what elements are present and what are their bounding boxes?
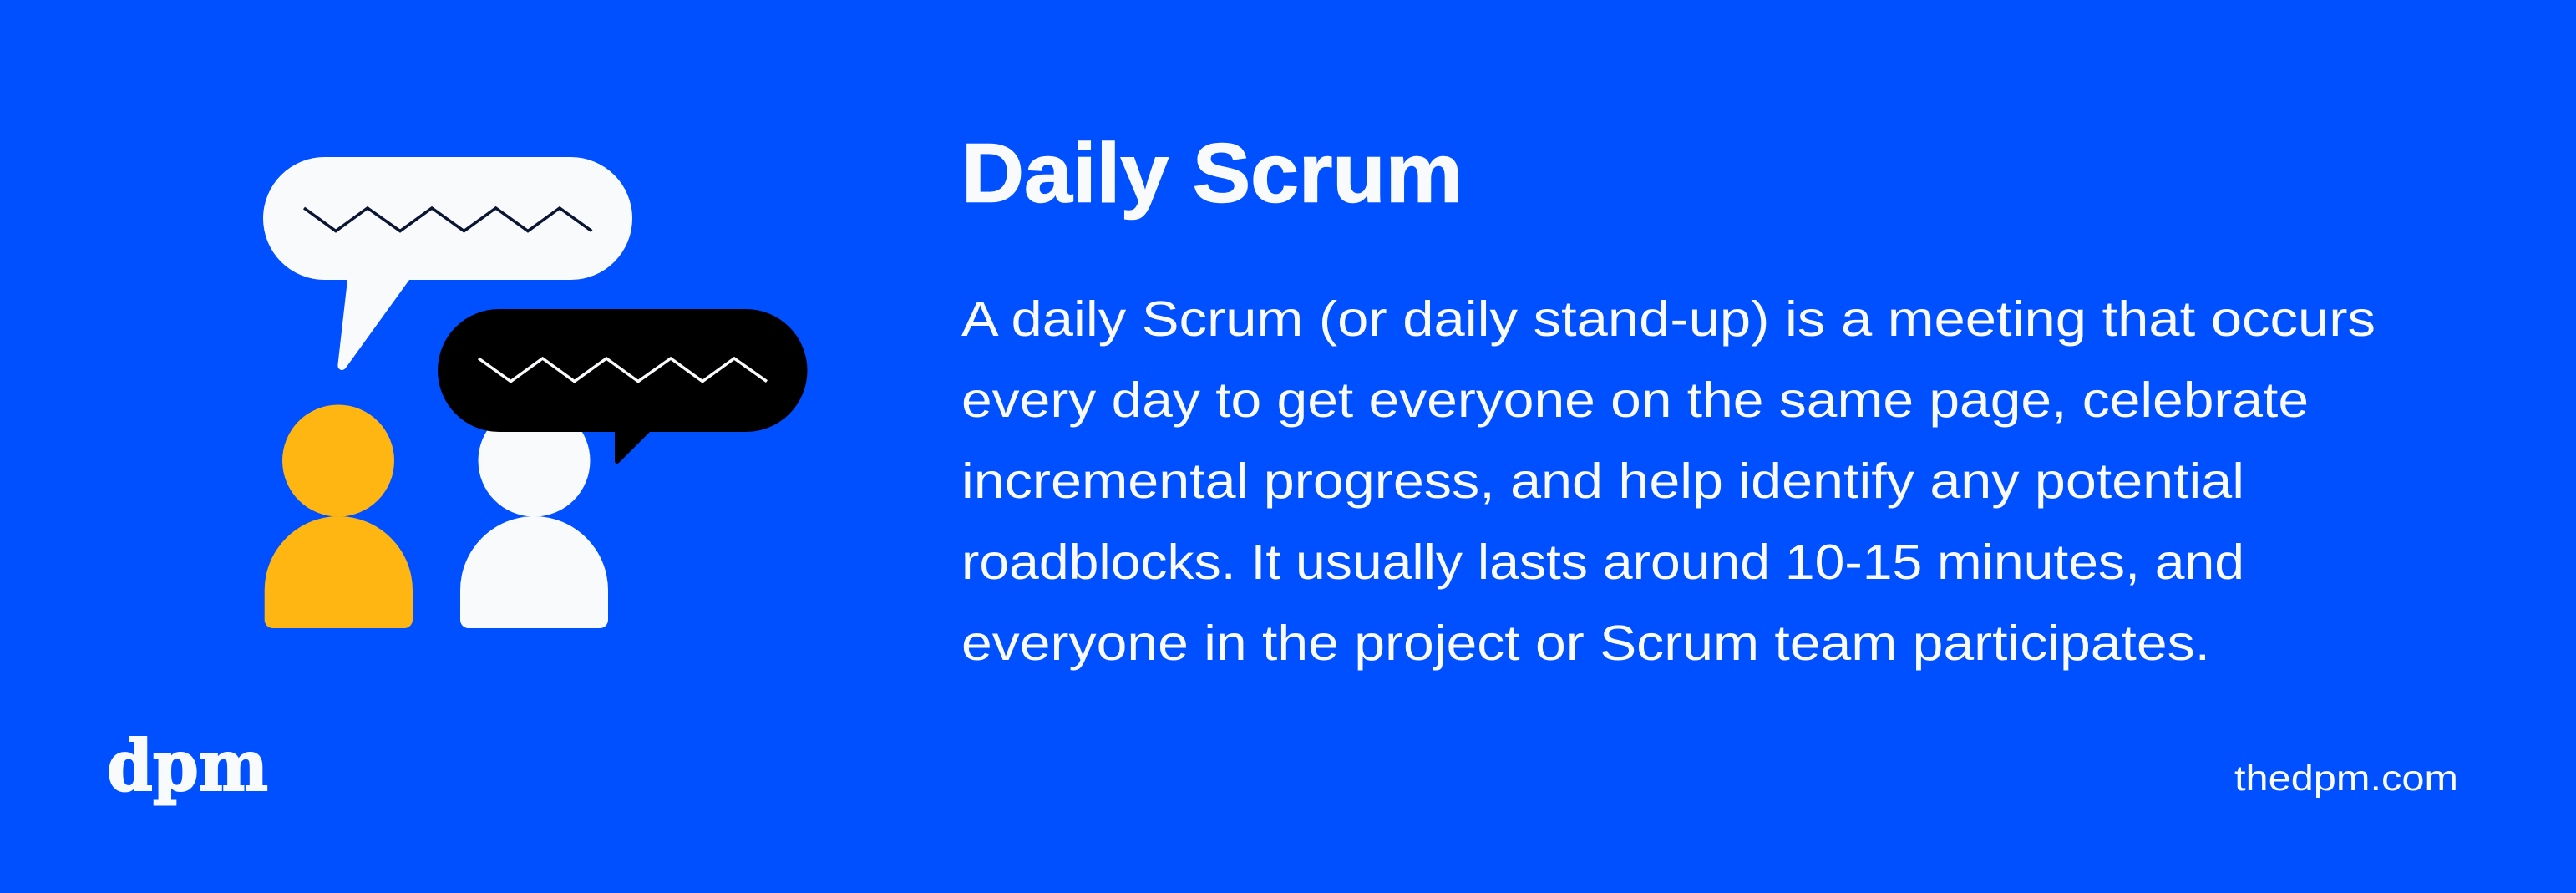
title: Daily Scrum — [961, 127, 1463, 221]
logo: dpm: dpm — [107, 724, 268, 807]
body paragraph: every day to get everyone on the same page, celebrate — [961, 373, 2309, 428]
body paragraph — [961, 292, 2376, 671]
icon: white person — [460, 404, 608, 628]
body paragraph: everyone in the project or Scrum team participates. — [961, 616, 2210, 671]
body paragraph: roadblocks. It usually lasts around 10-15 minutes, and — [961, 535, 2244, 590]
body paragraph: A daily Scrum (or daily stand-up) is a meeting that occurs — [961, 292, 2376, 347]
icon: black speech bubble — [438, 309, 807, 464]
website url: thedpm.com — [2234, 759, 2458, 799]
icon: white speech bubble — [263, 157, 632, 370]
icon: yellow person — [265, 404, 413, 628]
body paragraph: incremental progress, and help identify any potential — [961, 454, 2244, 509]
illustration: two people talking — [263, 157, 807, 628]
